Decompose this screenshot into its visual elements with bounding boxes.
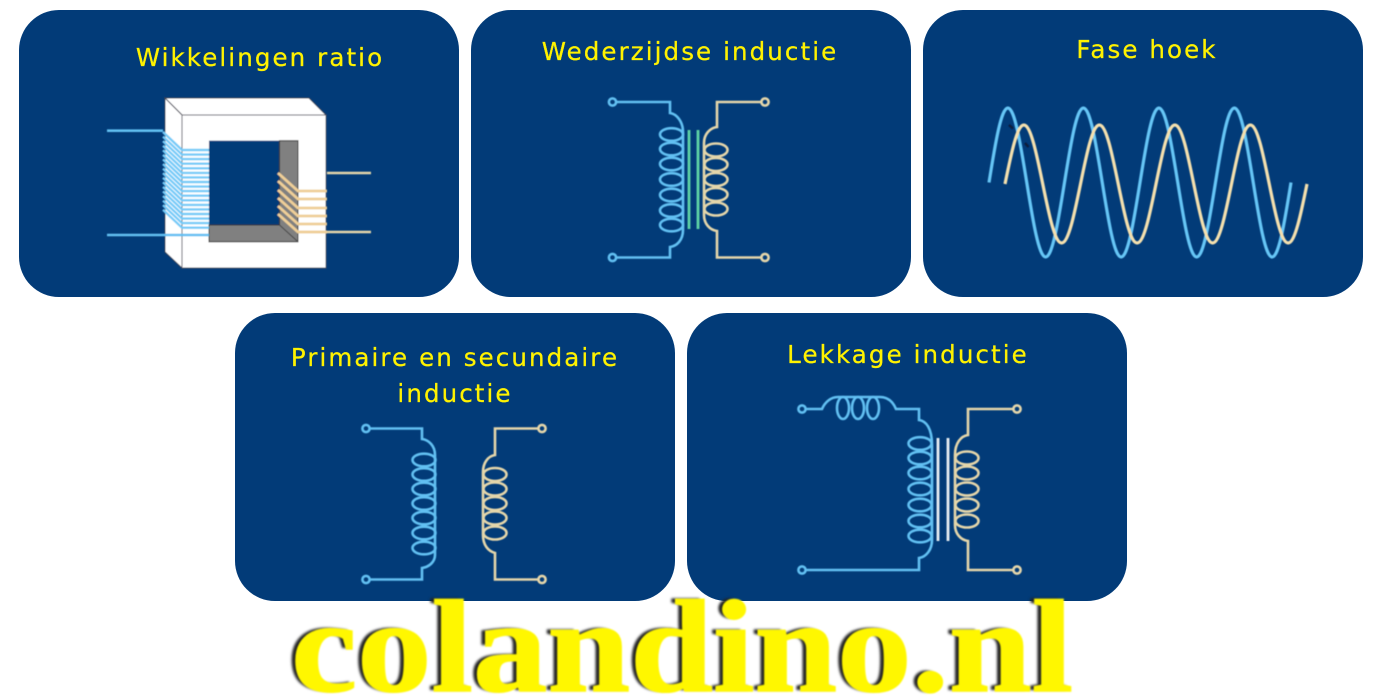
panel: Wederzijdse inductie [471, 10, 911, 297]
panel: Wikkelingen ratio [19, 10, 459, 297]
icon: separate primary and secondary inductors [362, 425, 546, 583]
heading: Primaire en secundaire inductie: Primaire en secundaire [291, 343, 619, 372]
heading: Wederzijdse inductie: Wederzijdse inductie [542, 37, 838, 66]
panel: Primaire en secundaire inductie: inductie [397, 379, 513, 408]
icon: transformer with leakage inductor [798, 397, 1021, 574]
heading: Wikkelingen ratio: Wikkelingen ratio [136, 43, 384, 72]
icon: coupled inductors with core [609, 98, 769, 261]
panel: Primaire en secundaire inductie [235, 313, 675, 601]
panel: Fase hoek [923, 10, 1363, 297]
icon: transformer core with windings [107, 98, 371, 268]
heading: Fase hoek: Fase hoek [1076, 35, 1218, 64]
panel: Lekkage inductie [687, 313, 1127, 601]
chart: two phase-shifted sine waves [989, 108, 1307, 257]
heading: Lekkage inductie: Lekkage inductie [787, 340, 1029, 369]
